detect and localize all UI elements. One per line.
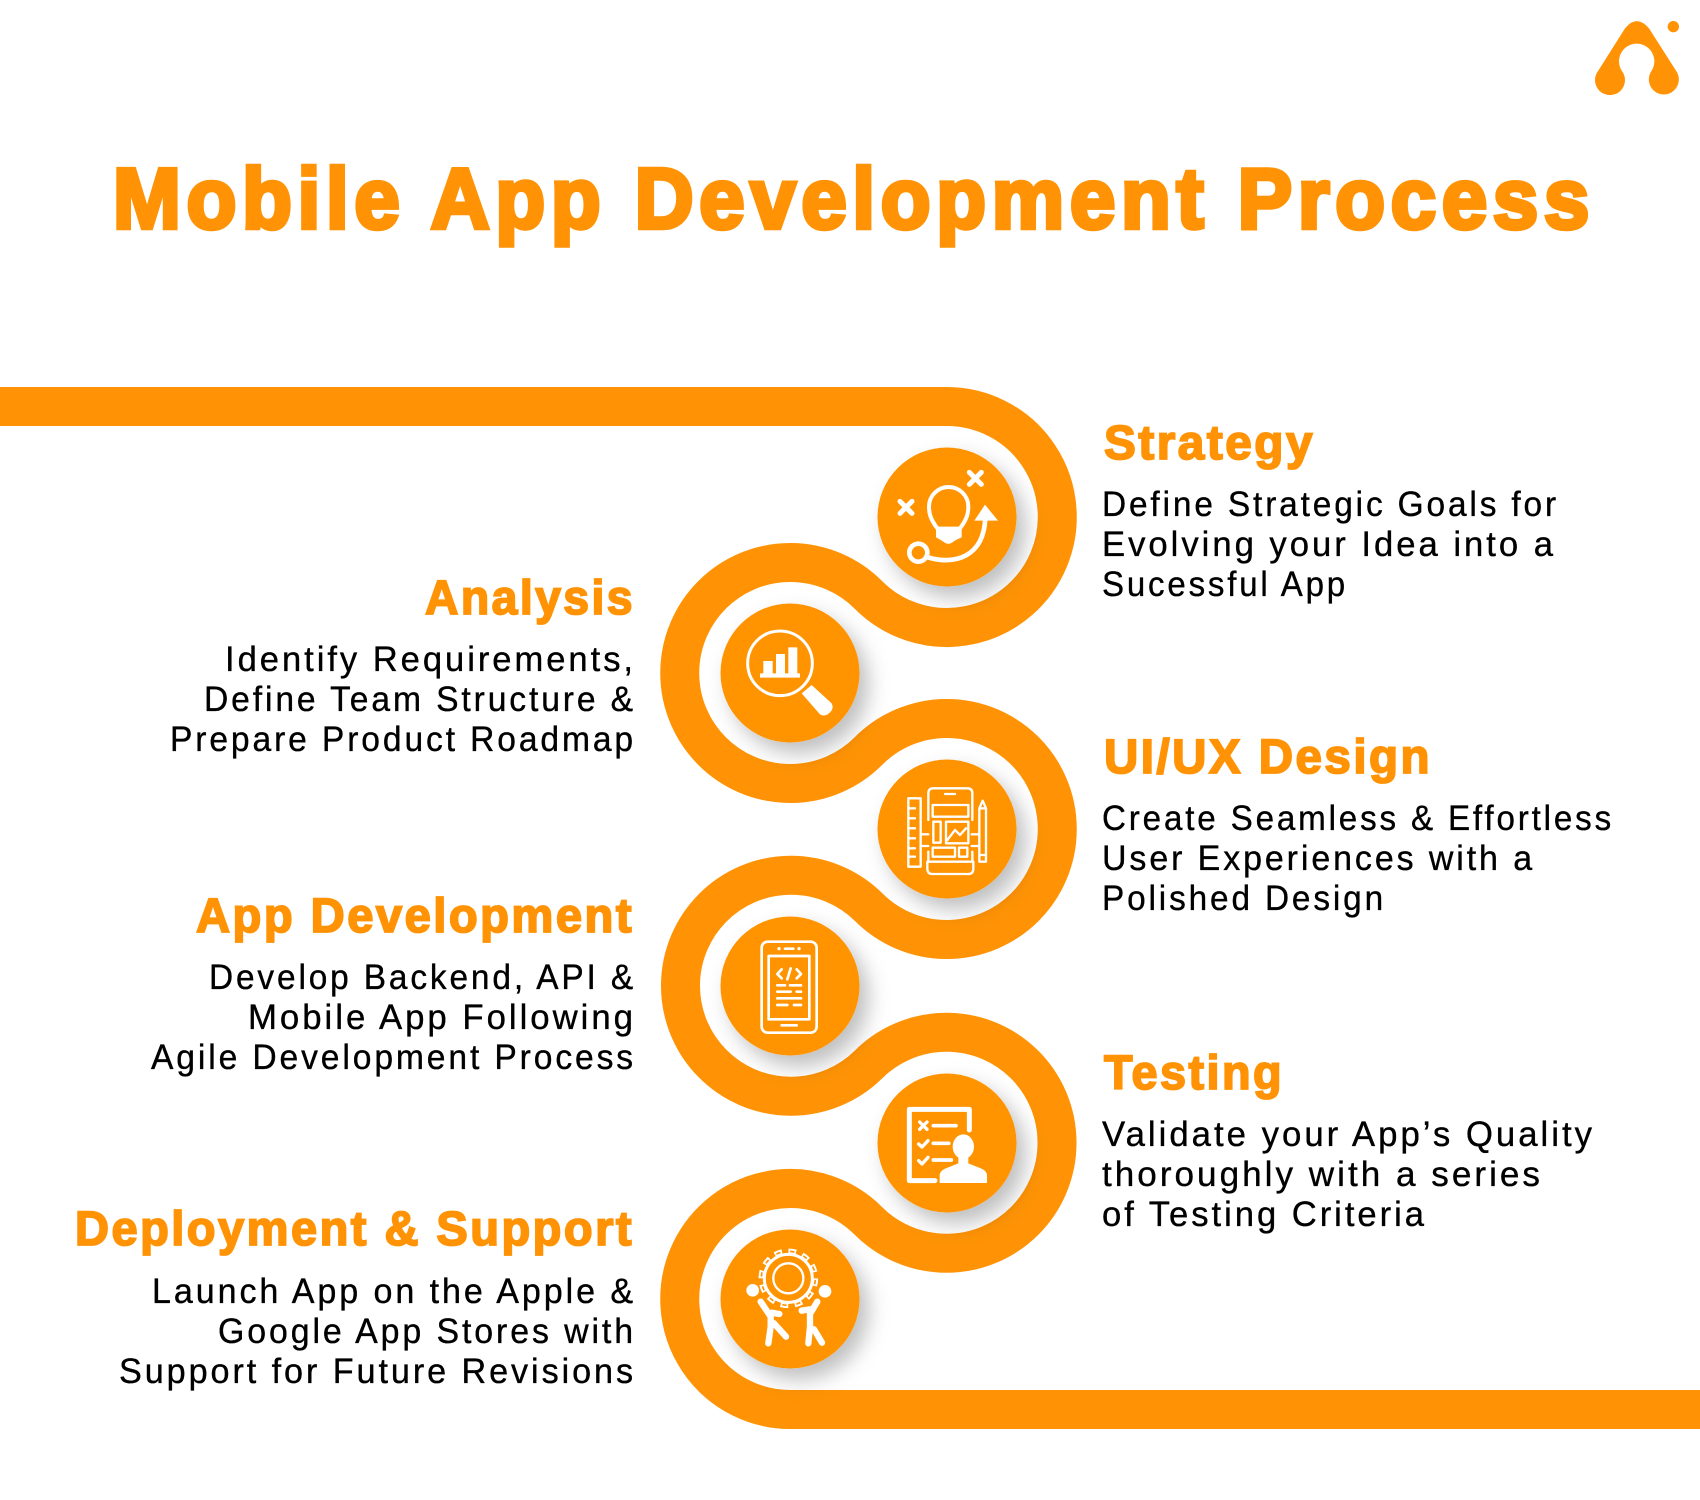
text: deployment and support bbox=[75, 1203, 636, 1391]
icon: phone with code bbox=[762, 942, 817, 1033]
text: analysis bbox=[170, 572, 636, 759]
text: testing: Testing bbox=[1104, 1047, 1284, 1100]
icon: lightbulb with arrow bbox=[900, 472, 998, 562]
text: analysis: Analysis bbox=[425, 572, 635, 625]
text: testing: thoroughly with a series bbox=[1102, 1155, 1543, 1194]
icon: magnifier with bars bbox=[748, 631, 833, 715]
step 4: development icon bbox=[720, 916, 860, 1056]
text: app development: App Development bbox=[196, 890, 634, 943]
text: analysis: Prepare Product Roadmap bbox=[170, 720, 636, 759]
text: ui/ux design bbox=[1102, 731, 1614, 918]
step 2: analysis icon bbox=[720, 604, 860, 742]
text: analysis: Define Team Structure & bbox=[204, 680, 636, 719]
title: Mobile App Development Process bbox=[113, 152, 1595, 247]
icon: wireframe phone, ruler and pencil bbox=[908, 788, 986, 874]
text: testing: of Testing Criteria bbox=[1102, 1195, 1427, 1234]
step 3: design icon bbox=[878, 760, 1016, 898]
text: ui/ux design: Create Seamless & Effortless bbox=[1102, 799, 1614, 838]
text: strategy: Evolving your Idea into a bbox=[1102, 525, 1556, 564]
text: app development: Agile Development Process bbox=[151, 1038, 636, 1077]
text: ui/ux design: Polished Design bbox=[1102, 879, 1386, 918]
text: deployment and support: Deployment & Support bbox=[75, 1203, 634, 1256]
text: strategy: Strategy bbox=[1104, 417, 1315, 470]
text: deployment and support: Support for Future Revisions bbox=[119, 1352, 636, 1391]
text: testing bbox=[1102, 1047, 1595, 1234]
winding process path bbox=[0, 406, 1700, 1410]
text: ui/ux design: UI/UX Design bbox=[1104, 731, 1432, 784]
logo bbox=[1595, 21, 1679, 95]
text: app development bbox=[151, 890, 636, 1077]
text: testing: Validate your App’s Quality bbox=[1102, 1115, 1595, 1154]
text: strategy: Sucessful App bbox=[1102, 565, 1348, 604]
icon: two people lifting a gear bbox=[746, 1251, 831, 1343]
text: deployment and support: Google App Stores with bbox=[218, 1312, 636, 1351]
text: app development: Mobile App Following bbox=[248, 998, 636, 1037]
text: strategy bbox=[1102, 417, 1559, 604]
text: ui/ux design: User Experiences with a bbox=[1102, 839, 1535, 878]
icon: checklist and tester bbox=[909, 1109, 987, 1183]
text: deployment and support: Launch App on the Apple & bbox=[152, 1272, 636, 1311]
text: strategy: Define Strategic Goals for bbox=[1102, 485, 1559, 524]
step 6: deployment icon bbox=[720, 1230, 860, 1368]
step 1: strategy icon bbox=[878, 448, 1016, 586]
text: analysis: Identify Requirements, bbox=[225, 640, 636, 679]
text: app development: Develop Backend, API & bbox=[209, 958, 636, 997]
step 5: testing icon bbox=[878, 1074, 1016, 1212]
